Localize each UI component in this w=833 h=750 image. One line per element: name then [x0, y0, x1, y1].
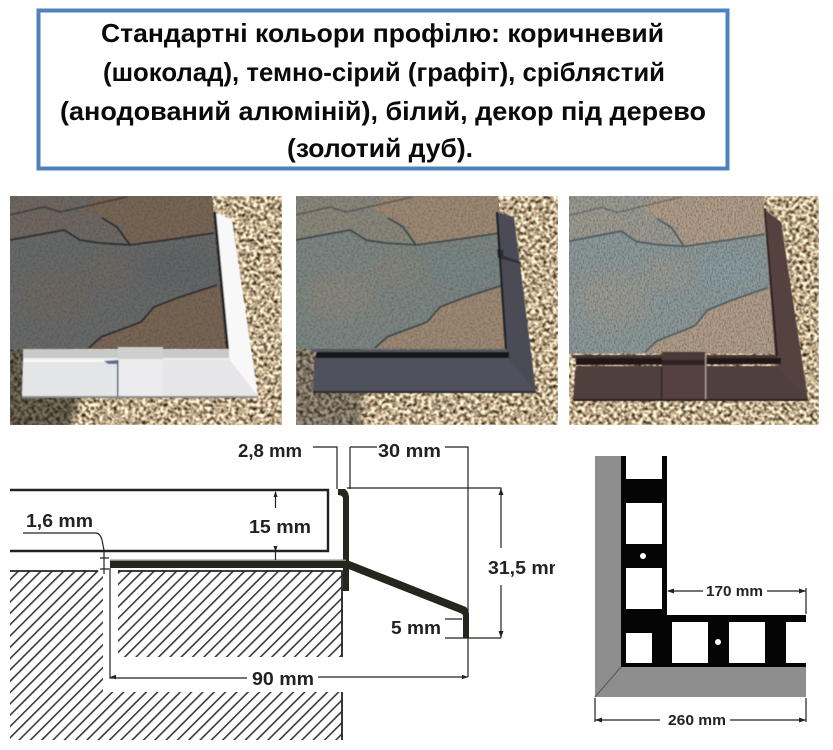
dimension 30 mm — [350, 441, 468, 677]
dimension 5 mm: 5 mm — [391, 618, 441, 638]
brown profile — [572, 209, 808, 401]
dimension 15 mm — [249, 491, 311, 560]
dimension 31,5 mm: 31,5 mm — [488, 558, 566, 578]
title box — [38, 10, 728, 168]
dimension 15 mm: 15 mm — [249, 517, 311, 537]
dimension 90 mm: 90 mm — [252, 669, 314, 689]
dimension 30 mm: 30 mm — [378, 441, 441, 461]
mounting holes — [640, 553, 721, 645]
section diagram: profile dimensions — [10, 441, 566, 740]
graphite profile — [311, 212, 536, 393]
dimension 260 mm — [595, 698, 806, 729]
dimension 31,5 mm — [347, 488, 566, 638]
dimension 2,8 mm — [238, 441, 350, 489]
title text — [60, 18, 706, 163]
title text: (шоколад), темно-сірий (графіт), сріблястий — [103, 57, 665, 87]
title text: Стандартні кольори профілю: коричневий — [101, 18, 664, 48]
photo: white profile — [0, 196, 282, 432]
hatched substrate — [10, 571, 342, 740]
dimension 260 mm: 260 mm — [668, 712, 726, 729]
photo: graphite profile — [290, 196, 558, 432]
black perforated flange — [621, 456, 806, 667]
grey profile face — [595, 456, 806, 697]
plan diagram: corner piece — [595, 456, 806, 729]
tile outline — [10, 490, 328, 551]
title text: (золотий дуб). — [287, 133, 473, 163]
white profile — [22, 212, 258, 398]
dimension 1,6 mm — [23, 511, 109, 574]
dimension 2,8 mm: 2,8 mm — [238, 441, 302, 461]
dimension 1,6 mm: 1,6 mm — [26, 511, 93, 531]
dimension 170 mm — [667, 583, 806, 614]
title text: (анодований алюміній), білий, декор під дерево — [60, 96, 706, 126]
dimension 90 mm — [110, 568, 468, 689]
photo: brown profile — [569, 196, 819, 425]
dimension 5 mm — [391, 618, 462, 638]
dimension 170 mm: 170 mm — [706, 583, 763, 600]
profile cross-section — [110, 489, 469, 638]
